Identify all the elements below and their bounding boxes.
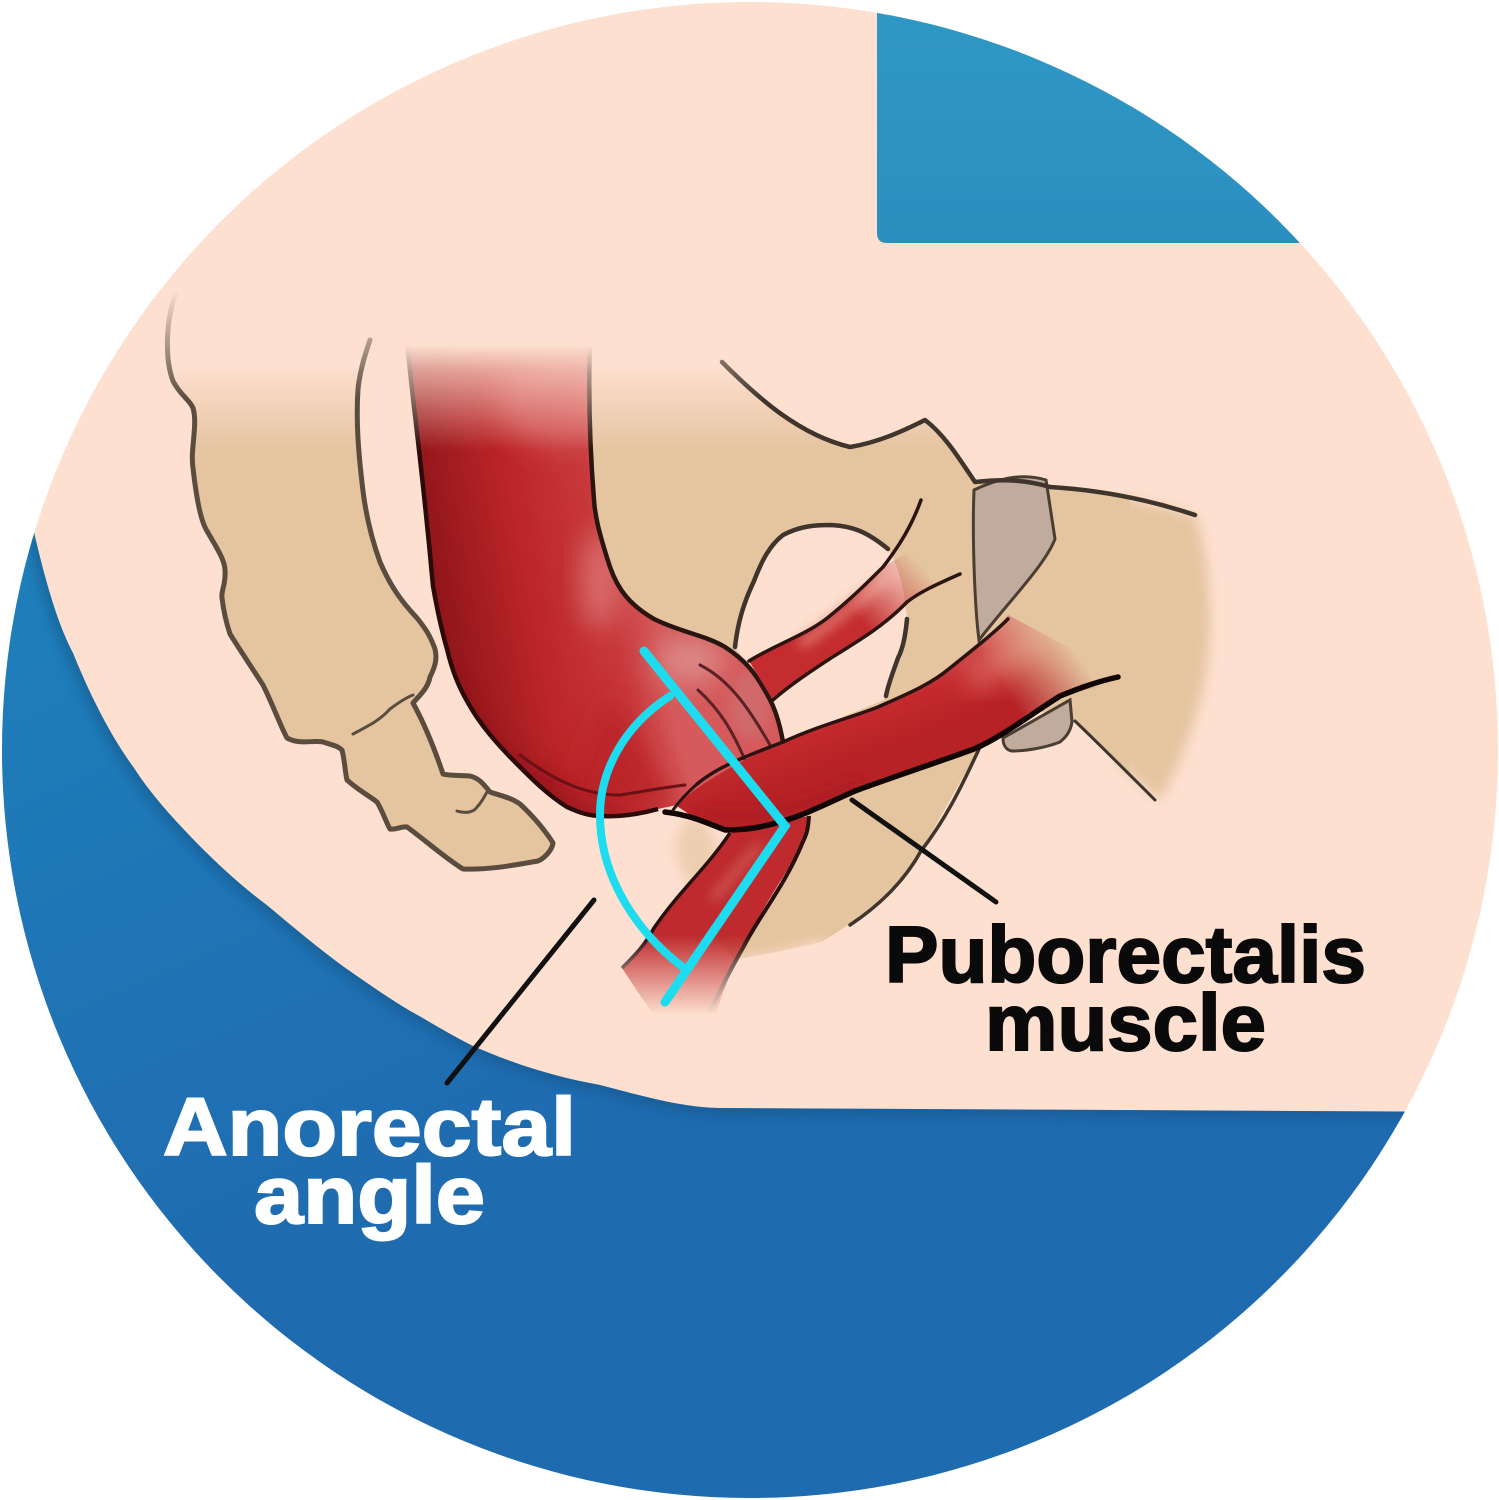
anorectal angle marker	[600, 651, 785, 1002]
label: anorectal angle: angle	[254, 1150, 485, 1241]
bone contour lines	[722, 362, 1195, 925]
leader line to anorectal angle	[447, 900, 594, 1083]
soft lower edge of bone	[735, 945, 825, 965]
obturator foramen opening	[735, 525, 907, 742]
upper muscle branch	[750, 555, 932, 698]
rectum	[407, 340, 783, 840]
label: puborectalis muscle: muscle	[985, 978, 1266, 1067]
rectum outline	[407, 340, 658, 816]
lower blue panel	[0, 505, 1499, 1500]
puborectalis sling	[677, 615, 1130, 830]
sacrum and coccyx	[167, 290, 553, 869]
leader line to puborectalis	[852, 800, 996, 902]
shadow along the skin edge	[34, 532, 1499, 1112]
left soft shading by anal canal	[676, 815, 716, 890]
right edge fade of bone	[1120, 497, 1210, 800]
sacrum outline	[167, 290, 553, 869]
pelvic bone tan area	[590, 362, 1210, 965]
label: puborectalis muscle	[885, 910, 1366, 1067]
label: anorectal angle	[163, 1082, 576, 1241]
pubic symphysis cartilage top	[973, 477, 1055, 640]
rectum fold details	[520, 665, 770, 795]
upper muscle branch outline	[749, 500, 960, 700]
puborectalis outline	[665, 619, 1118, 830]
anal canal	[622, 816, 809, 1030]
label: puborectalis muscle: Puborectalis	[885, 910, 1366, 999]
pubic symphysis cartilage bottom	[1003, 700, 1072, 751]
label: anorectal angle: Anorectal	[163, 1082, 576, 1173]
top right blue panel	[877, 12, 1300, 243]
